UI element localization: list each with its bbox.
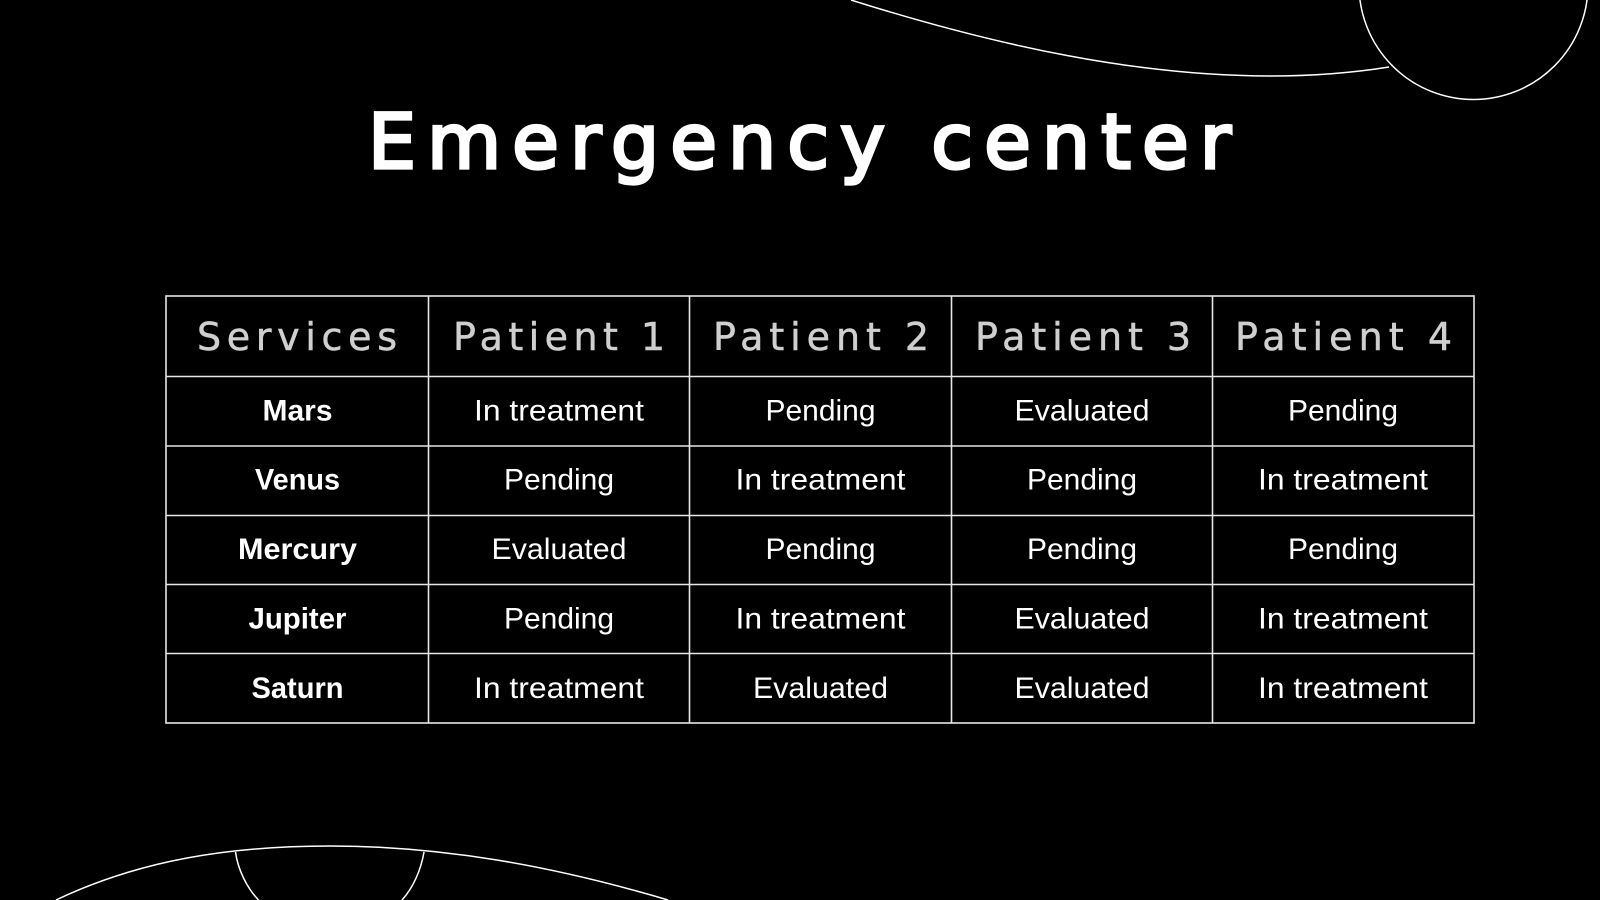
row: Venus: Pending [504,464,614,496]
row: Mars [262,394,1398,428]
row: Mercury [238,533,1398,566]
row: Saturn [252,672,1429,705]
row: Mercury: Pending [1288,533,1398,566]
row: Mars: In treatment [474,394,645,428]
row: Saturn: In treatment [1258,672,1429,705]
row: Mars: Evaluated [1014,394,1150,428]
row: Jupiter: In treatment [1258,602,1429,636]
table header row: Services [197,315,397,359]
row: Venus: Venus [255,464,340,496]
row: Mars: Pending [1288,394,1398,428]
table header row: Patient 3 [975,315,1191,359]
row: Mercury: Pending [766,533,876,566]
row: Mercury: Mercury [238,533,357,566]
row: Jupiter: Jupiter [248,602,347,636]
row: Jupiter [248,602,1429,636]
row: Saturn: Evaluated [1014,672,1150,705]
row: Jupiter: In treatment [736,602,906,636]
row: Saturn: Evaluated [753,672,888,705]
decoration: bottom left arc and circle [56,846,668,900]
decoration: top right curve and circle [851,0,1588,100]
table header row: Patient 4 [1235,315,1452,359]
row: Venus: Pending [1027,464,1137,496]
row: Mars: Mars [262,394,332,428]
row: Venus [255,464,1429,496]
row: Venus: In treatment [736,464,906,496]
row: Jupiter: Pending [504,602,614,636]
table header row: Patient 2 [713,315,929,359]
row: Mercury: Pending [1027,533,1137,566]
row: Mercury: Evaluated [492,533,626,566]
row: Saturn: In treatment [474,672,645,705]
row: Venus: In treatment [1258,464,1429,496]
table: emergency center services by patient [166,296,1474,723]
table header row [197,315,1452,359]
title: Emergency center [368,97,1232,186]
table header row: Patient 1 [453,315,665,359]
table grid [166,296,1474,723]
row: Mars: Pending [766,394,876,428]
row: Jupiter: Evaluated [1014,602,1150,636]
row: Saturn: Saturn [252,672,344,705]
